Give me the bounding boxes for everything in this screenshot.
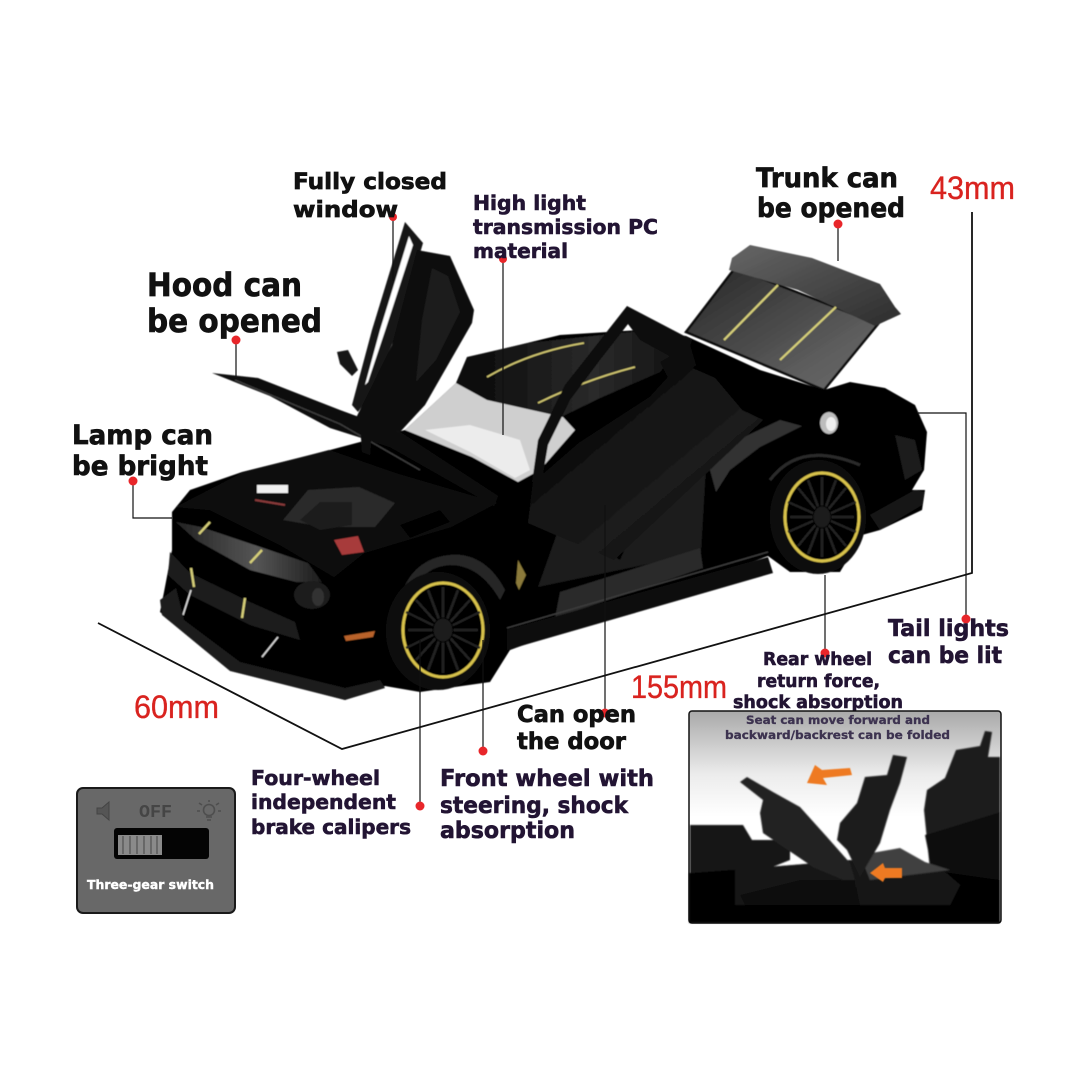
- raised trunk and spoiler: [686, 245, 901, 390]
- switch caption: Three-gear switch: [87, 877, 214, 892]
- label: lamp can be bright: Lamp can: [72, 420, 213, 451]
- raised rear door: [337, 222, 474, 432]
- label: tail lights: can be lit: [888, 643, 1002, 669]
- open front door: [528, 306, 763, 560]
- label: high light transmission: transmission PC: [473, 215, 658, 239]
- off label: OFF: [139, 803, 172, 823]
- label: hood can be opened: Hood can: [147, 266, 302, 304]
- label: high light transmission: material: [473, 239, 568, 263]
- label: can open the door: Can open: [517, 702, 636, 728]
- car model: [160, 222, 927, 700]
- label: high light transmission: High light: [473, 191, 586, 215]
- dimension: 60mm: 60mm: [134, 689, 219, 725]
- label: front wheel: steering, shock: [440, 793, 629, 819]
- seats and floor: [689, 731, 1000, 923]
- label: can open the door: the door: [517, 729, 627, 755]
- icon: speaker: [97, 802, 109, 820]
- open hood: [212, 373, 498, 506]
- label: four-wheel brakes: independent: [251, 790, 396, 814]
- dimension: 155mm: 155mm: [631, 669, 727, 705]
- leader lines and dots: [128, 213, 970, 810]
- roof with stripes: [456, 330, 686, 420]
- label: hood can be opened: be opened: [147, 302, 322, 340]
- icon: orange arrow down: [870, 863, 902, 882]
- seat caption: Seat can move forward and: [746, 713, 930, 727]
- side sill and door opening: [507, 450, 773, 650]
- rear quarter highlights: [395, 412, 924, 640]
- icon: light bulb: [197, 800, 221, 820]
- label: front wheel: Front wheel with: [440, 766, 654, 792]
- front fascia with stripes: [160, 522, 385, 700]
- label: rear wheel: Rear wheel: [763, 649, 872, 670]
- label: four-wheel brakes: Four-wheel: [251, 766, 380, 790]
- label: rear wheel: shock absorption: [733, 692, 903, 713]
- label: trunk can be opened: Trunk can: [756, 163, 898, 194]
- engine bay: [176, 450, 497, 577]
- rear wheel: [770, 460, 866, 574]
- label: fully closed window: window: [293, 198, 398, 223]
- label: tail lights: Tail lights: [888, 616, 1009, 642]
- dimension lines: [98, 212, 972, 749]
- panel: adjustable seat: [689, 711, 1001, 923]
- label: lamp can be bright: be bright: [72, 451, 208, 482]
- icon: orange arrow up: [807, 765, 852, 785]
- label: rear wheel: return force,: [757, 671, 880, 692]
- switch knob: [118, 835, 162, 855]
- label: trunk can be opened: be opened: [757, 193, 905, 224]
- interior seen through windshield: [405, 383, 575, 482]
- seat caption: backward/backrest can be folded: [725, 728, 950, 742]
- panel: three-gear switch: [77, 788, 235, 913]
- label: fully closed window: Fully closed: [293, 170, 447, 195]
- car body: [160, 330, 927, 700]
- label: four-wheel brakes: brake calipers: [251, 815, 411, 839]
- label: front wheel: absorption: [440, 818, 575, 844]
- switch slot: [114, 828, 209, 859]
- front wheel: [386, 572, 490, 690]
- dimension: 43mm: 43mm: [930, 170, 1015, 206]
